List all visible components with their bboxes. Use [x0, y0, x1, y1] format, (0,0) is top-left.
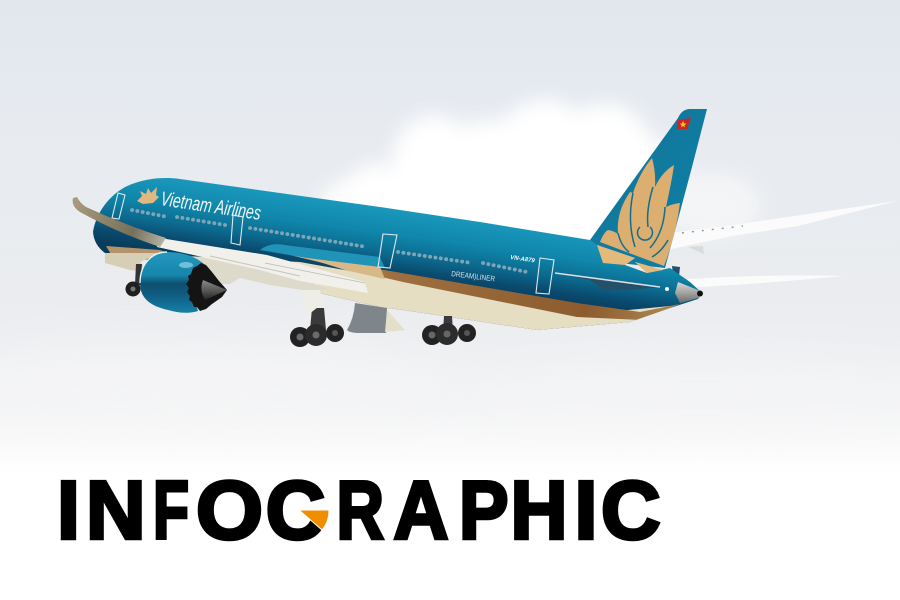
- title: INFOGRAPHIC: I: [574, 464, 597, 556]
- nose stripe: [106, 246, 164, 260]
- registration: VN-A879: [510, 255, 536, 265]
- title: INFOGRAPHIC: [57, 464, 661, 556]
- flag on tail: [677, 118, 691, 129]
- gold lower tail stripe: [597, 245, 635, 265]
- title: INFOGRAPHIC: O: [196, 464, 263, 556]
- title: INFOGRAPHIC: R: [336, 464, 384, 556]
- forward gear bay: [105, 253, 160, 272]
- tail cone: [675, 282, 703, 303]
- clouds: [0, 100, 900, 430]
- gold fairing stripe: [307, 258, 385, 279]
- belly fairing and flap: [347, 303, 405, 333]
- orange wedge in the letter G: [299, 510, 329, 530]
- title: INFOGRAPHIC: F: [153, 464, 189, 556]
- fuselage: [93, 178, 702, 340]
- dreamliner wordmark: DREAM)LINER: [451, 269, 496, 283]
- far horizontal stabilizer: [686, 275, 843, 287]
- brown cheatline: [290, 255, 680, 320]
- cream belly: [110, 252, 670, 330]
- title: INFOGRAPHIC: I: [57, 464, 80, 556]
- passenger windows: [132, 210, 527, 272]
- engine: [140, 252, 227, 313]
- gold lotus on tail: [592, 158, 680, 273]
- doors: [112, 193, 554, 294]
- title: INFOGRAPHIC: C: [266, 464, 325, 556]
- title: INFOGRAPHIC: A: [394, 464, 448, 556]
- far wing: [667, 201, 897, 254]
- under-wing cream fairing: [200, 258, 330, 290]
- rear landing gear: [422, 316, 476, 345]
- wing-body fairing highlight: [260, 244, 385, 268]
- lotus logo on fuselage: [137, 187, 159, 204]
- nose landing gear: [126, 264, 142, 296]
- airline name: Vietnam Airlines: [159, 188, 262, 225]
- main landing gear: [290, 283, 344, 347]
- title: INFOGRAPHIC: N: [86, 464, 146, 556]
- title: INFOGRAPHIC: P: [459, 464, 508, 556]
- vertical tail fin: [590, 109, 707, 273]
- airplane: [73, 109, 897, 347]
- tail winglet: [672, 266, 680, 276]
- near wing: [73, 197, 368, 293]
- title: INFOGRAPHIC: H: [510, 464, 568, 556]
- title: INFOGRAPHIC: C: [601, 464, 661, 556]
- tail strake: [555, 273, 669, 291]
